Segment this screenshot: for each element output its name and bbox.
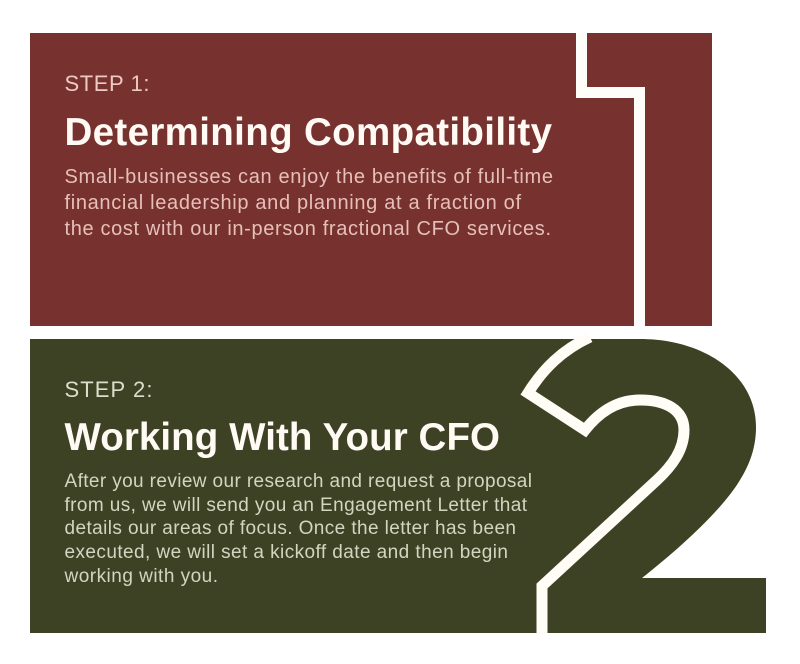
step 1 description: Small-businesses can enjoy the benefits of full-time (64, 166, 553, 188)
numeral 2 outline (528, 337, 684, 633)
panel: step 2 (30, 337, 766, 633)
step 1 label: STEP 1: (64, 71, 150, 96)
numeral 2 panel background (30, 339, 766, 633)
step 1 description (64, 166, 553, 240)
step 1 heading: Determining Compatibility (64, 111, 553, 154)
step 2 description: After you review our research and request a proposal (64, 471, 532, 492)
step 1 description: financial leadership and planning at a fraction of (64, 192, 521, 214)
step 2 description: from us, we will send you an Engagement Letter that (64, 495, 528, 516)
step 2 description: working with you. (64, 566, 218, 587)
step 2 heading: Working With Your CFO (64, 416, 500, 459)
step 2 description (64, 471, 532, 587)
numeral 1 panel background (30, 33, 712, 326)
panel: step 1 (30, 33, 712, 326)
step 2 description: details our areas of focus. Once the letter has been (64, 518, 516, 539)
numeral 1 outline (582, 33, 640, 326)
step 2 label: STEP 2: (64, 377, 152, 402)
step 2 description: executed, we will set a kickoff date and then begin (64, 542, 508, 563)
step 1 description: the cost with our in-person fractional CFO services. (64, 218, 551, 240)
